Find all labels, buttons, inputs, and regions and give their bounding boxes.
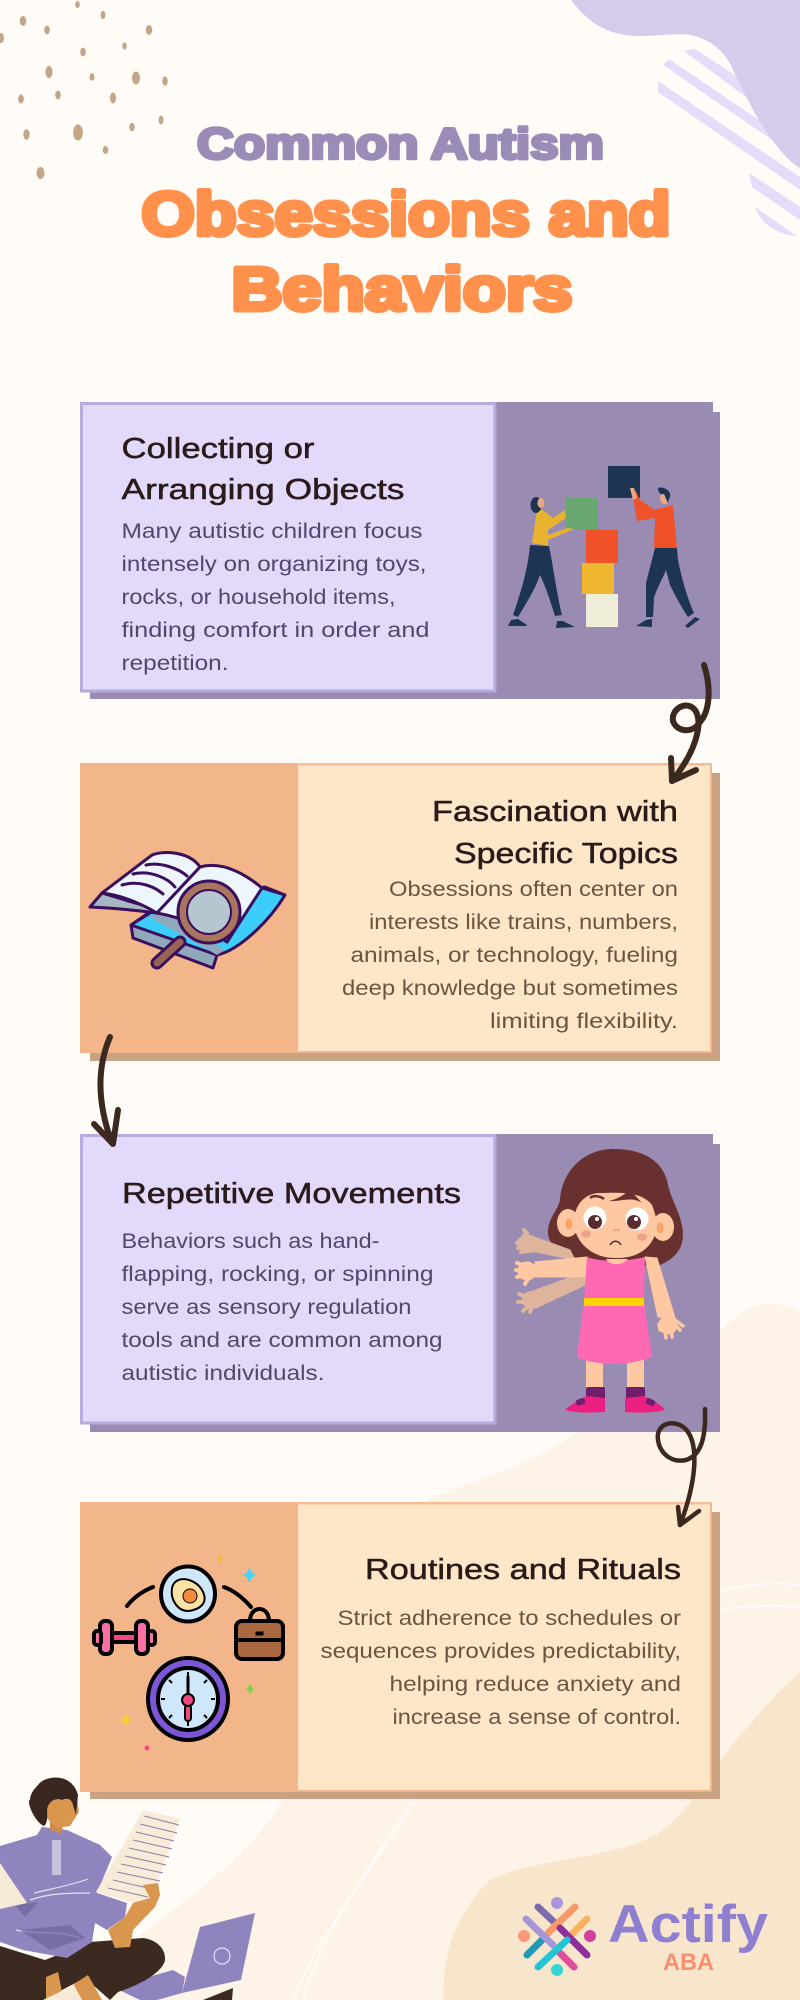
- illustration: person reading with laptop: [0, 1777, 255, 2000]
- laptop screen: [182, 1913, 255, 1993]
- shirt: [0, 1827, 127, 1958]
- panel: collecting or arranging objects: [82, 402, 720, 699]
- text: fascination description: limiting flexibility.: [490, 1010, 678, 1033]
- heading: collecting or arranging objects: [122, 433, 404, 506]
- text: collecting description: repetition.: [122, 652, 228, 675]
- title: Behaviors: [232, 255, 572, 323]
- text: fascination description: interests like trains, numbers,: [369, 911, 678, 934]
- text: logo wordmark: Actify: [608, 1895, 769, 1954]
- arrow: first to second card: [671, 665, 709, 781]
- heading: fascination with specific topics: [432, 796, 678, 870]
- icon: logo woven mark: [526, 1907, 587, 1967]
- title: Obsessions and: [142, 180, 670, 248]
- ghost arms: [517, 1230, 585, 1312]
- panel: routines and rituals: [80, 1502, 720, 1799]
- text: collecting description: Many autistic children focus: [122, 520, 422, 543]
- heading: fascination with specific topics: Specific Topics: [454, 838, 678, 870]
- background: tan blob: [443, 1672, 800, 2000]
- text: logo sub-wordmark: ABA: [663, 1949, 714, 1976]
- icon: people stacking blocks: [508, 466, 700, 628]
- text: repetitive movements description: flapping, rocking, or spinning: [122, 1263, 434, 1286]
- text: fascination description: deep knowledge but sometimes: [342, 977, 678, 1000]
- laptop base: [113, 1970, 185, 2000]
- text: fascination description: animals, or technology, fueling: [350, 944, 678, 967]
- main arms: [516, 1257, 683, 1338]
- text: repetitive movements description: Behaviors such as hand-: [122, 1230, 380, 1253]
- text: collecting description: intensely on organizing toys,: [122, 553, 426, 576]
- left paper: [0, 1863, 27, 1909]
- heading: collecting or arranging objects: Collecting or: [122, 433, 315, 465]
- logo: Actify ABA: [518, 1895, 769, 1976]
- decoration: scattered dots: [0, 1, 168, 179]
- text: routines description: [320, 1607, 681, 1729]
- background: white curved lines: [293, 1583, 800, 2000]
- title: Common Autism: [197, 120, 604, 168]
- arm and hand: [108, 1883, 160, 1948]
- text: routines description: increase a sense of control.: [392, 1706, 681, 1729]
- heading: repetitive movements: Repetitive Movements: [122, 1178, 461, 1210]
- heading: routines and rituals: Routines and Rituals: [365, 1554, 681, 1586]
- text: repetitive movements description: serve as sensory regulation: [122, 1296, 412, 1319]
- trousers: [0, 1938, 165, 2000]
- head: [50, 1820, 63, 1834]
- text: routines description: sequences provides predictability,: [320, 1640, 681, 1663]
- icon: girl flapping hands: [516, 1149, 683, 1413]
- text: collecting description: rocks, or household items,: [122, 586, 396, 609]
- right paper: [96, 1810, 180, 1903]
- figure: woman: [508, 497, 575, 628]
- arrow: second to third card: [94, 1037, 118, 1144]
- text: repetitive movements description: autistic individuals.: [122, 1362, 324, 1385]
- arrow: third to fourth card: [658, 1409, 705, 1525]
- background: lower cream blob: [100, 1304, 800, 2000]
- text: routines description: helping reduce anxiety and: [390, 1673, 681, 1696]
- heading: collecting or arranging objects: Arranging Objects: [122, 474, 404, 506]
- title: [142, 120, 670, 323]
- text: collecting description: [122, 520, 430, 675]
- decoration: top right stripes and lavender blob: [571, 0, 800, 236]
- text: fascination description: Obsessions often center on: [389, 878, 678, 901]
- panel: fascination with specific topics: [80, 763, 720, 1061]
- text: fascination description: [342, 878, 678, 1033]
- text: repetitive movements description: [122, 1230, 442, 1385]
- icon: open book and magnifying glass: [90, 853, 285, 968]
- text: routines description: Strict adherence to schedules or: [338, 1607, 681, 1630]
- text: repetitive movements description: tools and are common among: [122, 1329, 442, 1352]
- text: collecting description: finding comfort in order and: [122, 619, 430, 642]
- panel: repetitive movements: [82, 1134, 720, 1432]
- heading: fascination with specific topics: Fascination with: [432, 796, 678, 828]
- figure: man: [630, 487, 700, 628]
- icon: daily routine cycle: [94, 1554, 283, 1750]
